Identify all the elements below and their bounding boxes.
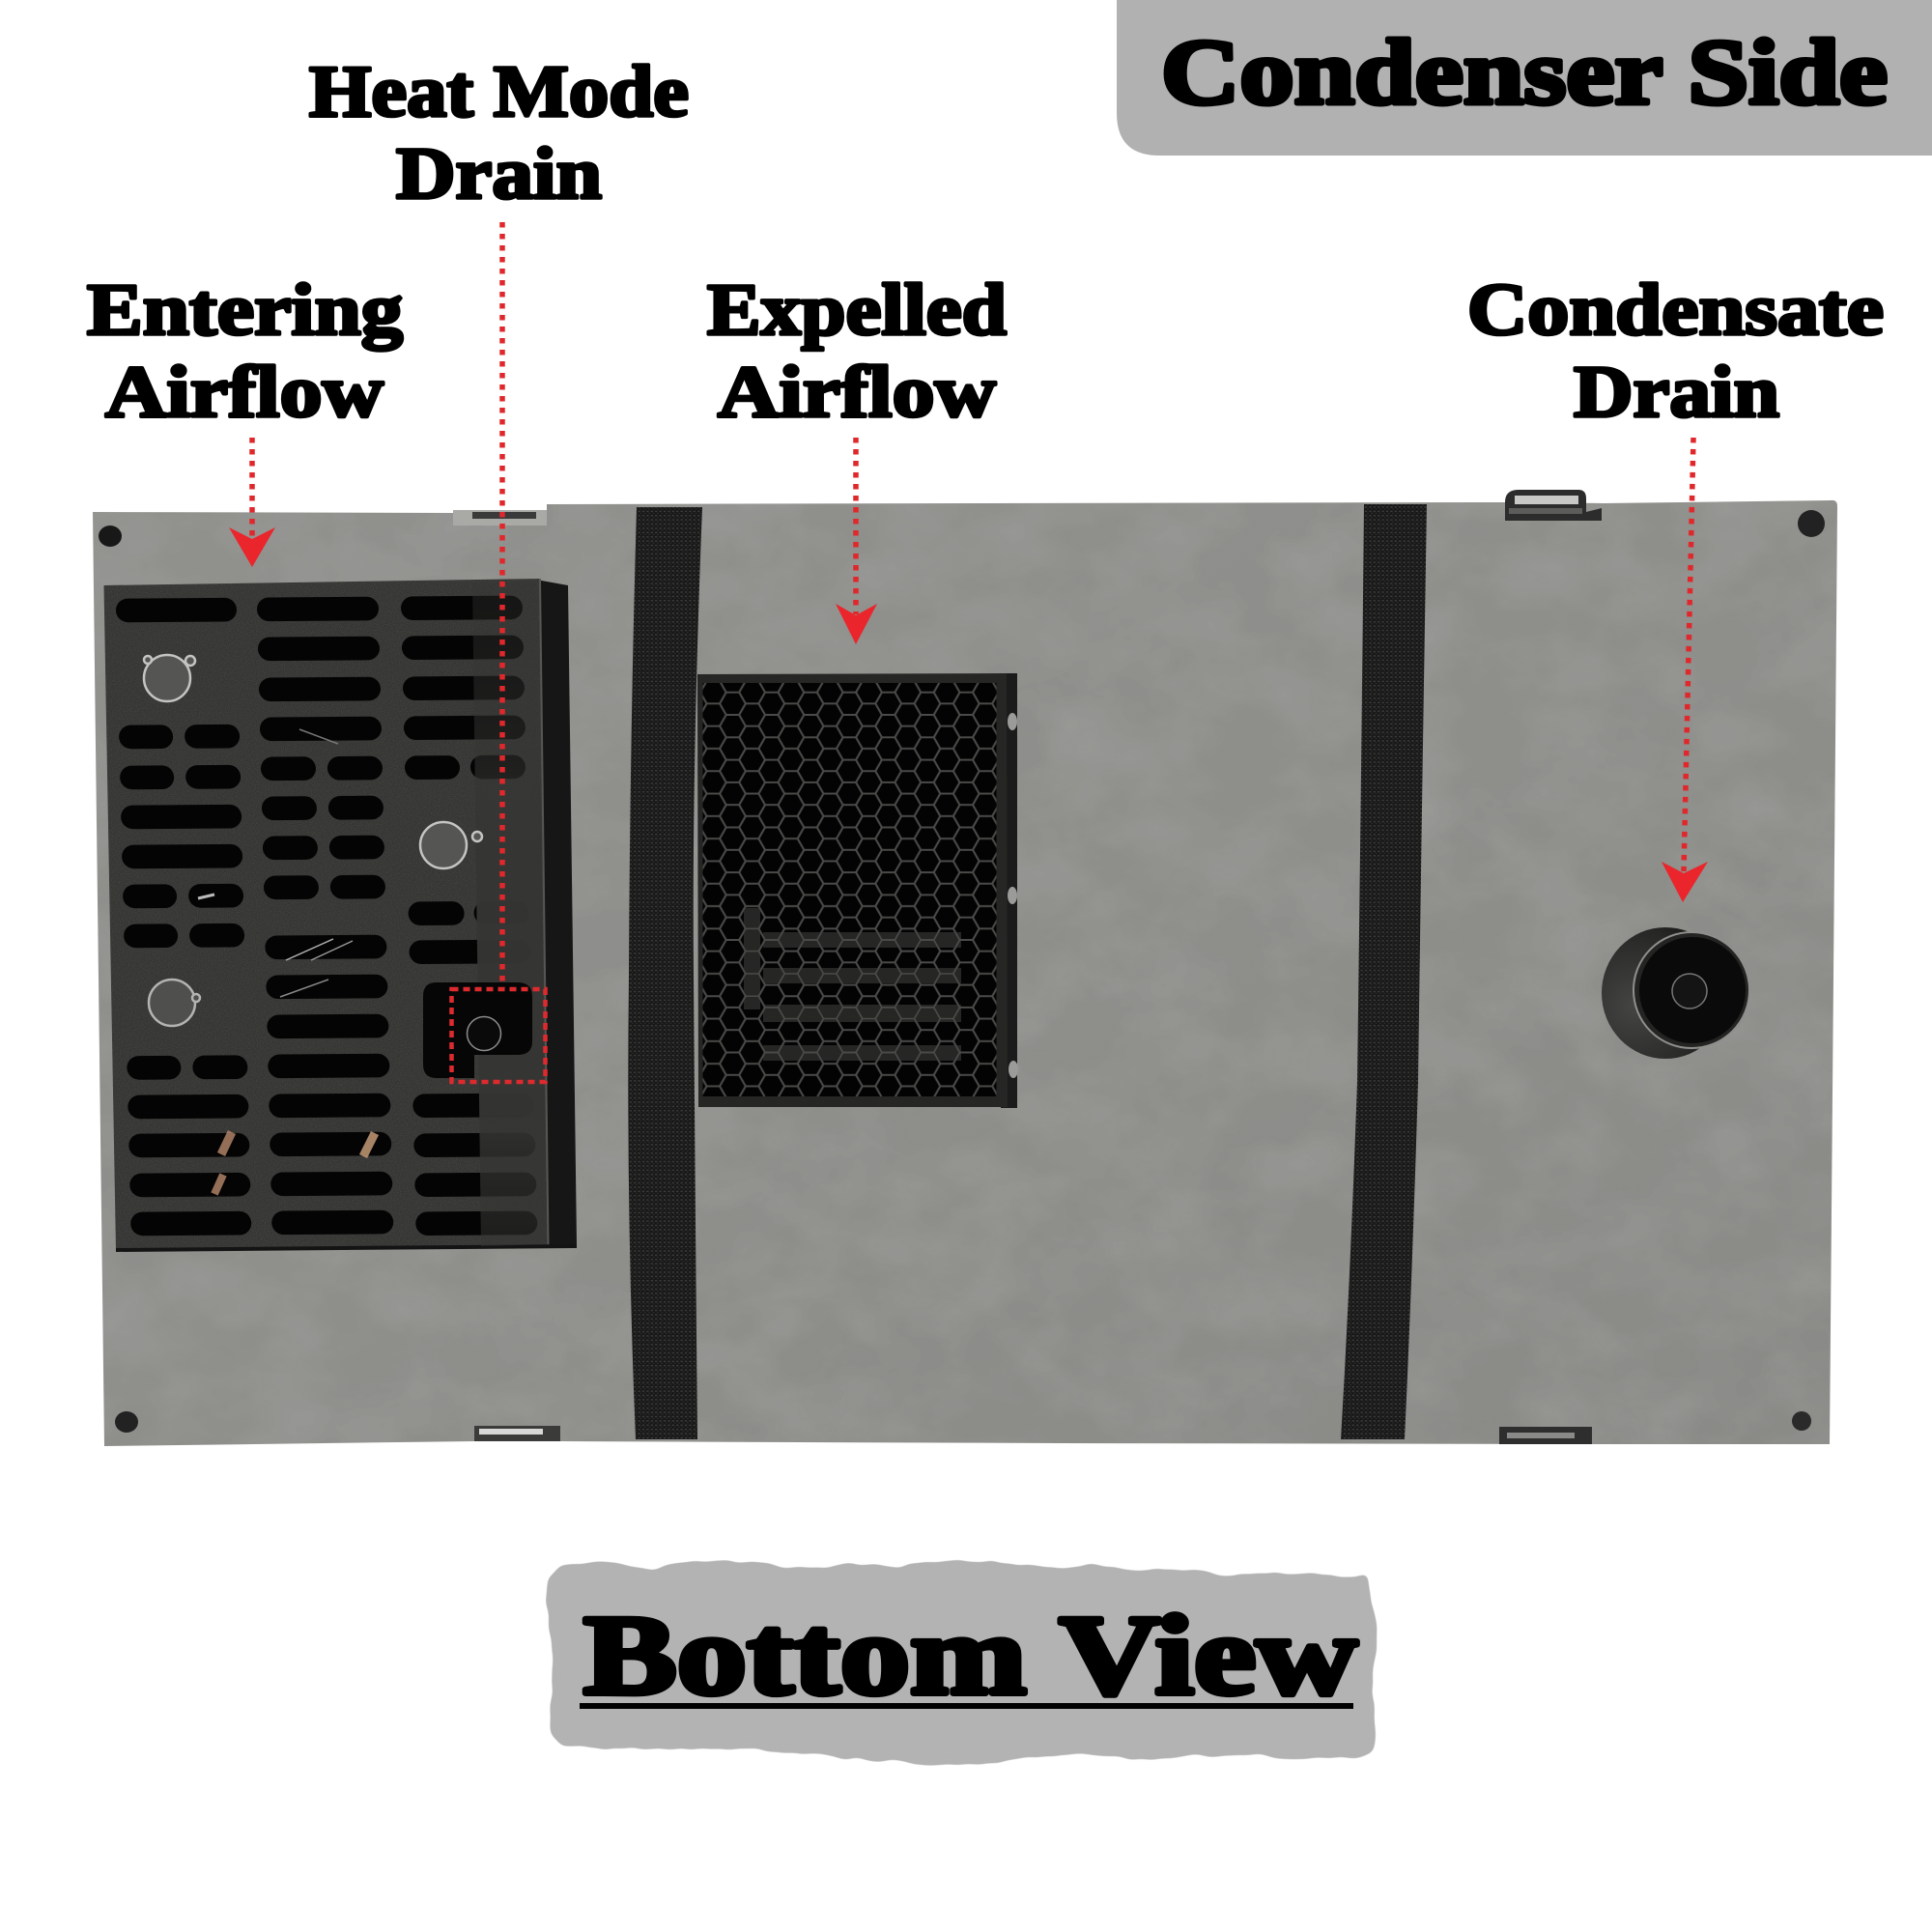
translucent overlay on right slot ends bbox=[472, 582, 547, 1246]
grille screw: top left bbox=[144, 655, 195, 701]
label: Entering Airflow: Entering bbox=[87, 270, 403, 351]
corner hole: top right bbox=[1798, 510, 1825, 537]
arrow: Entering Airflow bbox=[229, 438, 275, 567]
heading tab: Condenser Side: Condenser Side bbox=[1161, 20, 1888, 124]
label: Entering Airflow: Airflow bbox=[105, 352, 384, 433]
clip: bottom left bbox=[474, 1426, 560, 1441]
interior fins seen through mesh bbox=[744, 908, 961, 1061]
grille plate bbox=[697, 673, 1008, 1107]
heading tab: Condenser Side bbox=[1117, 0, 1932, 156]
grille flange bbox=[536, 580, 577, 1246]
strap: right bbox=[1341, 504, 1427, 1439]
label: Condensate Drain: Drain bbox=[1574, 352, 1779, 433]
strap: left bbox=[628, 507, 702, 1439]
underline bbox=[580, 1703, 1353, 1709]
condensate drain fitting bbox=[1602, 927, 1749, 1059]
flange screw: middle bbox=[1008, 887, 1017, 904]
arrow: Condensate Drain bbox=[1662, 438, 1708, 902]
corner hole: bottom right bbox=[1792, 1411, 1811, 1431]
grille slots bbox=[116, 596, 538, 1237]
flange screw: top bbox=[1008, 713, 1017, 730]
label: Heat Mode Drain: Drain bbox=[396, 133, 602, 214]
corner hole: bottom left bbox=[115, 1411, 138, 1433]
arrow: Expelled Airflow bbox=[836, 438, 877, 644]
grille screw: right bbox=[420, 822, 482, 868]
label: Heat Mode Drain bbox=[309, 51, 689, 214]
label: Expelled Airflow: Expelled bbox=[707, 270, 1007, 351]
torn paper shape bbox=[547, 1559, 1377, 1765]
label: Heat Mode Drain: Heat Mode bbox=[309, 51, 689, 132]
panel body bbox=[93, 500, 1837, 1446]
grille flange bbox=[1001, 673, 1017, 1108]
clip: top right bbox=[1505, 490, 1602, 521]
expelled airflow hexagonal grille bbox=[697, 673, 1018, 1108]
corner hole: top left bbox=[99, 526, 122, 547]
label: Condensate Drain: Condensate bbox=[1467, 270, 1884, 351]
label: Entering Airflow bbox=[87, 270, 403, 433]
title text: Bottom View bbox=[583, 1592, 1357, 1719]
grille screw: bottom left bbox=[149, 980, 200, 1026]
clip: top left bbox=[453, 510, 547, 526]
clip: bottom right bbox=[1499, 1427, 1592, 1444]
label: Expelled Airflow bbox=[707, 270, 1007, 433]
badge: Bottom View bbox=[547, 1559, 1377, 1765]
entering airflow slotted grille bbox=[104, 579, 577, 1250]
label: Expelled Airflow: Airflow bbox=[718, 352, 996, 433]
flange screw: bottom bbox=[1009, 1061, 1018, 1078]
heat mode drain recess bbox=[423, 982, 532, 1078]
drain hole bbox=[468, 1016, 500, 1051]
label: Condensate Drain bbox=[1467, 270, 1884, 433]
hexagon mesh bbox=[703, 683, 997, 1096]
air conditioner unit: bottom panel photo bbox=[93, 490, 1837, 1446]
interior glints through slots bbox=[198, 729, 375, 1194]
grille plate bbox=[104, 579, 549, 1250]
callout: Heat Mode Drain line and box bbox=[452, 222, 545, 1082]
